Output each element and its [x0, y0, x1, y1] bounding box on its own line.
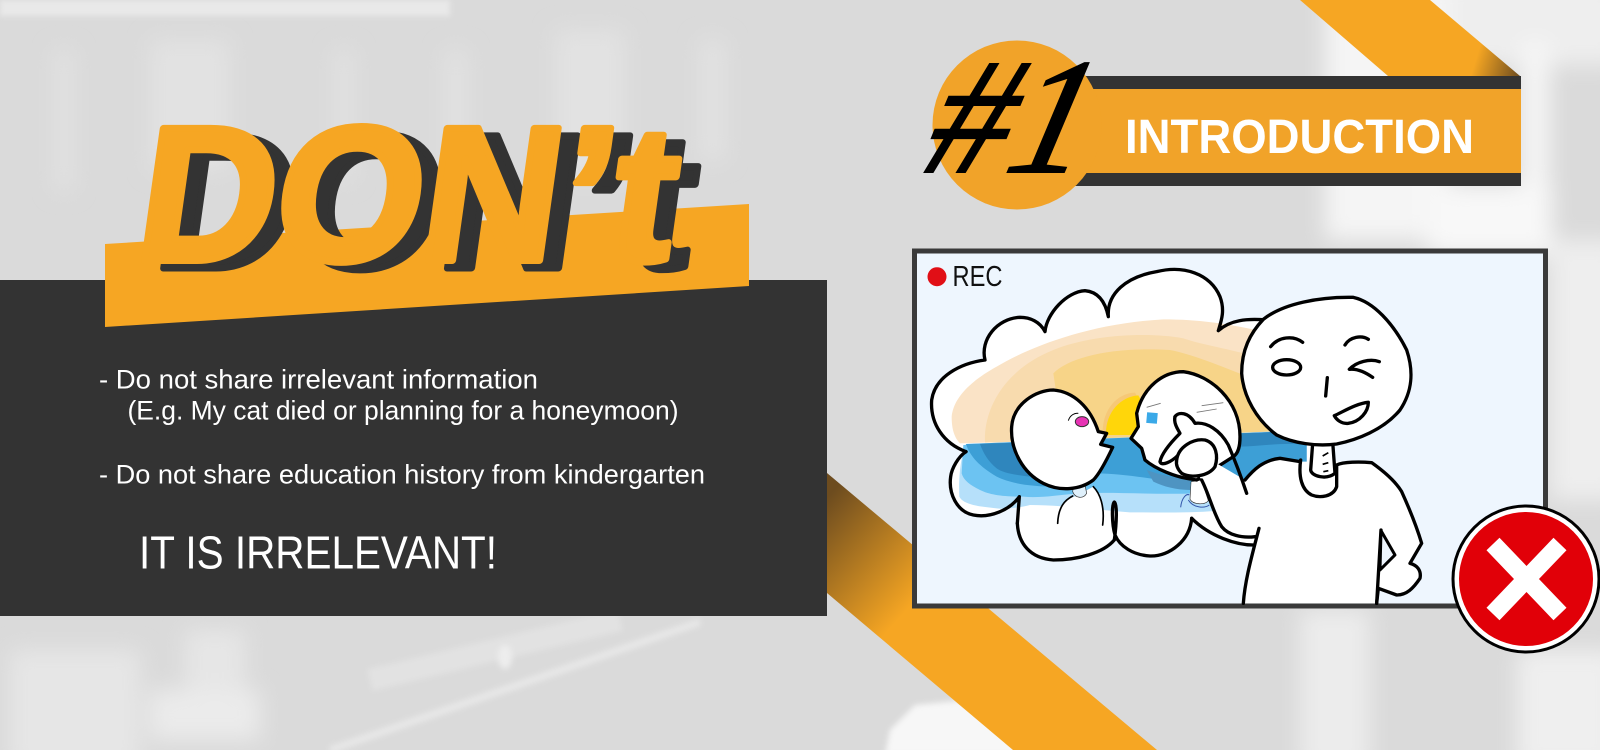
- main figure: neck: [1311, 442, 1335, 477]
- REC indicator: REC: [952, 261, 1002, 293]
- heading banner: slanted orange strip: [105, 204, 749, 327]
- text: second bullet: - Do not share education history from kindergarten: [99, 460, 705, 490]
- main figure: head: [1242, 297, 1411, 445]
- sunset sky: [952, 319, 1307, 443]
- text: first bullet: - Do not share irrelevant information: [99, 364, 538, 394]
- panel: recording frame illustration: [914, 251, 1546, 606]
- panel: dark text block: [0, 280, 827, 616]
- heading: DON't: DON’t: [126, 86, 692, 301]
- header text: INTRODUCTION: [1125, 111, 1474, 164]
- text: emphasis: IT IS IRRELEVANT!: [139, 526, 497, 578]
- thought cloud fill: [932, 269, 1313, 560]
- icon: red prohibition cross: [1453, 506, 1599, 652]
- illustration: thought cloud and figures: [932, 269, 1422, 603]
- diagonal ribbon: upper: [1300, 0, 1520, 76]
- section header: #1 Introduction: [913, 26, 1521, 210]
- number circle: [932, 40, 1102, 210]
- main figure: body and arm: [1160, 297, 1422, 603]
- text: example: (E.g. My cat died or planning for a honeymoon): [128, 396, 678, 426]
- small figure: right: [1131, 372, 1240, 507]
- small figure: left: [1012, 390, 1113, 525]
- text block: guidance: [99, 364, 705, 578]
- REC indicator: [928, 261, 1002, 293]
- heading: DON't: DON’t: [145, 94, 711, 309]
- number: #1: #1: [913, 26, 1118, 208]
- thought cloud outline: [932, 269, 1267, 523]
- cloud bottom outline: [1017, 502, 1192, 560]
- diagonal ribbon: lower: [827, 473, 1157, 750]
- sea: [959, 430, 1307, 512]
- header band: [1060, 76, 1521, 186]
